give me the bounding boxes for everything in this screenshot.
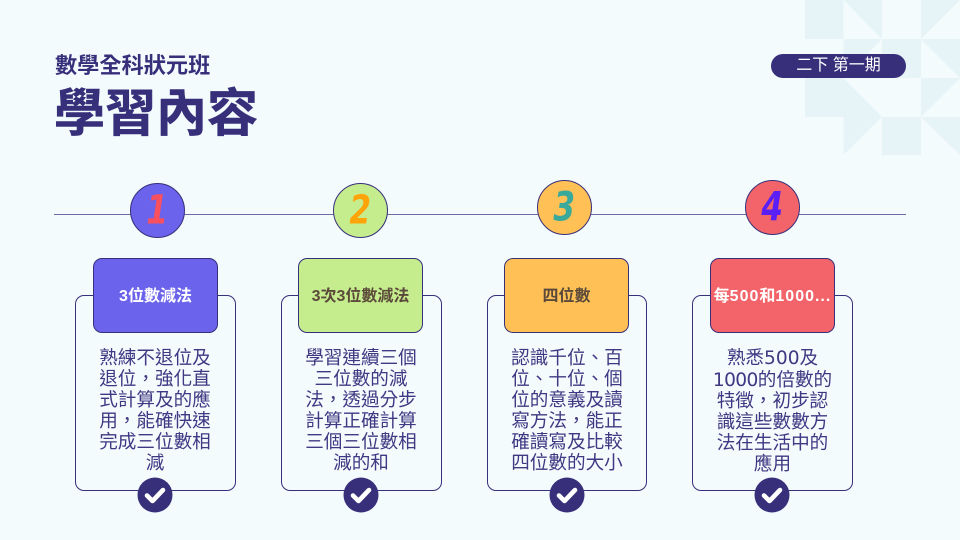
panel: 3位數減法 (75, 258, 236, 512)
icon: check (138, 478, 172, 512)
panel heading (298, 258, 423, 333)
panel text: 熟練不退位及退位，強化直式計算及的應用，能確快速完成三位數相減 (99, 347, 211, 473)
step badge 4: 4 (762, 184, 783, 230)
step badge 4 (745, 180, 800, 235)
panel text: 熟悉500及 (727, 347, 818, 369)
step badge 1 (130, 183, 185, 238)
panel: 每500和1000 (692, 258, 853, 512)
decorative pattern (805, 0, 960, 155)
panel heading (504, 258, 629, 333)
step badge 3 (537, 180, 592, 235)
panel: 3次3位數減法 (281, 258, 442, 512)
step badge 2 (333, 183, 388, 238)
panel text: 認識千位、百位、十位、個位的意義及讀寫方法，能正確讀寫及比較四位數的大小 (511, 347, 623, 473)
timeline line (54, 214, 906, 215)
step badge 2: 2 (350, 187, 371, 233)
panel text: 學習連續三個三位數的減法，透過分步計算正確計算三個三位數相減的和 (305, 347, 417, 473)
step badge 3: 3 (554, 184, 575, 230)
step badge 1: 1 (147, 187, 168, 233)
title: 學習內容 (54, 85, 258, 142)
icon: check (754, 478, 790, 512)
panel heading (710, 258, 835, 333)
panel heading: 3次3位數減法 (312, 288, 409, 305)
panel heading (93, 258, 218, 333)
panel heading: 四位數 (542, 288, 590, 305)
panel text: 1000的倍數的特徵，初步認識這些數數方法在生活中的應用 (713, 369, 832, 474)
period badge: 二下 第一期 (796, 57, 881, 74)
subtitle: 數學全科狀元班 (55, 53, 210, 78)
icon: check (344, 478, 378, 512)
panel: 四位數 (487, 258, 647, 512)
icon: check (550, 478, 584, 512)
panel heading: 每500和1000... (714, 288, 831, 305)
period badge (771, 54, 906, 78)
panel heading: 3位數減法 (119, 288, 192, 305)
